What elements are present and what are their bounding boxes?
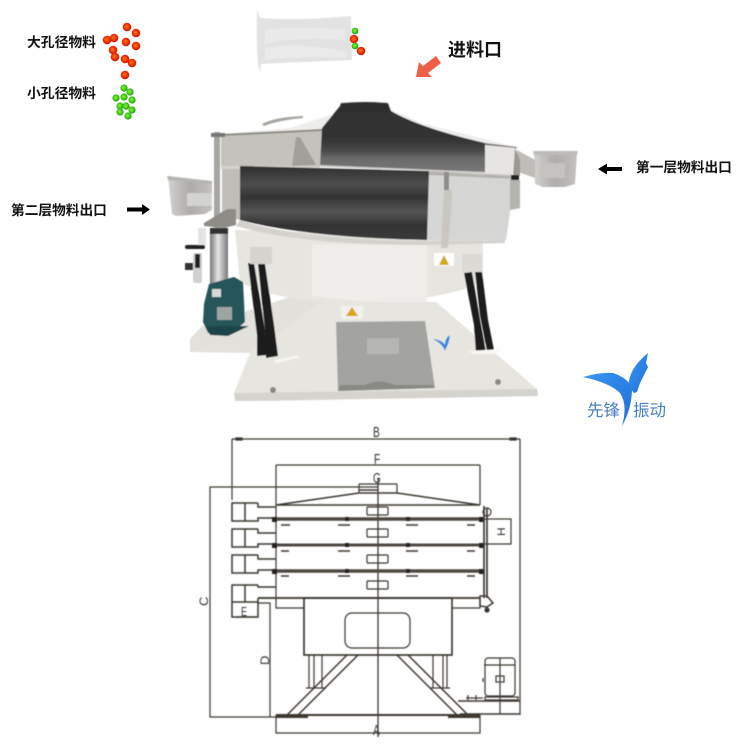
left base plate xyxy=(190,297,330,353)
clip dashes xyxy=(281,525,475,576)
access door xyxy=(345,613,410,648)
arrow: feed inlet xyxy=(416,56,441,77)
label: second layer outlet: 第二层物料出口 xyxy=(11,202,107,218)
side outlets xyxy=(232,503,276,617)
label: feed inlet: 进料口 xyxy=(448,40,502,60)
label: large aperture material: 大孔径物料 xyxy=(27,34,96,50)
dimension C xyxy=(198,487,378,717)
centre line xyxy=(377,478,379,737)
dimension D: D xyxy=(259,656,272,665)
upper housing right xyxy=(485,143,517,176)
icon: green small particles xyxy=(112,84,136,120)
logo left wing xyxy=(583,373,632,426)
lower collars xyxy=(276,598,480,608)
lower housing left xyxy=(222,166,240,220)
icon: particles falling from bag xyxy=(350,28,365,55)
dimension E xyxy=(236,605,256,620)
side frame xyxy=(275,505,277,598)
dimension G: G xyxy=(373,470,381,486)
pneumatic column xyxy=(210,228,228,284)
drive motor xyxy=(458,658,520,714)
sieve bars xyxy=(258,519,483,598)
dimension F xyxy=(276,451,480,505)
right rod and latch xyxy=(480,506,493,612)
base bolts xyxy=(270,379,501,393)
bar bolts xyxy=(272,517,484,574)
warning sign xyxy=(434,253,454,266)
clamp hardware right xyxy=(441,148,520,248)
support posts xyxy=(306,655,450,688)
warning sign lower xyxy=(341,306,363,319)
pneumatic bracket xyxy=(204,209,236,228)
vertical clamp left xyxy=(211,132,225,232)
lower housing right xyxy=(427,172,512,240)
metal control plate xyxy=(336,321,435,391)
logo right wing xyxy=(629,353,648,393)
dimension B: B xyxy=(373,424,380,440)
dimension F: F xyxy=(374,451,380,467)
technical drawing xyxy=(198,424,520,738)
main base plate xyxy=(234,302,538,401)
logo text right: 振动 xyxy=(633,401,666,420)
label: first layer outlet: 第一层物料出口 xyxy=(636,159,732,175)
arrow: first layer outlet xyxy=(598,164,622,174)
small logo on base xyxy=(433,335,450,351)
dimension A xyxy=(276,715,480,738)
icon: material bag xyxy=(257,10,352,72)
dimension B xyxy=(232,424,520,715)
dimension A: A xyxy=(373,722,380,738)
machine photo xyxy=(167,102,578,401)
diagonal legs xyxy=(287,655,468,715)
dimension C: C xyxy=(198,597,211,606)
frame band under cutaway xyxy=(236,220,505,245)
motor xyxy=(203,277,249,336)
dark lower cutaway xyxy=(240,166,429,240)
lower body xyxy=(304,598,452,655)
dimension D xyxy=(258,603,272,717)
dimension G xyxy=(359,470,397,493)
right outlet cup xyxy=(517,150,578,187)
layer windows xyxy=(367,507,388,589)
dimension E: E xyxy=(241,605,247,620)
label: small aperture material: 小孔径物料 xyxy=(27,85,96,101)
arrow: second layer outlet xyxy=(127,204,150,215)
upper housing left xyxy=(221,130,322,168)
dimension H xyxy=(484,519,511,544)
logo: brand xyxy=(583,353,666,426)
rubber legs right xyxy=(462,254,502,354)
pneumatic valve xyxy=(185,228,206,283)
sieve lid xyxy=(276,490,480,505)
upper lid white rim xyxy=(222,102,517,147)
machine body white cylinder xyxy=(235,230,483,303)
rubber legs left xyxy=(248,247,298,363)
left outlet cup xyxy=(167,176,212,216)
dark upper cutaway xyxy=(320,102,485,172)
dimension H: H xyxy=(496,527,508,536)
base line xyxy=(276,715,480,717)
icon: red large particles xyxy=(103,23,140,79)
logo text: 先锋 xyxy=(587,401,620,420)
